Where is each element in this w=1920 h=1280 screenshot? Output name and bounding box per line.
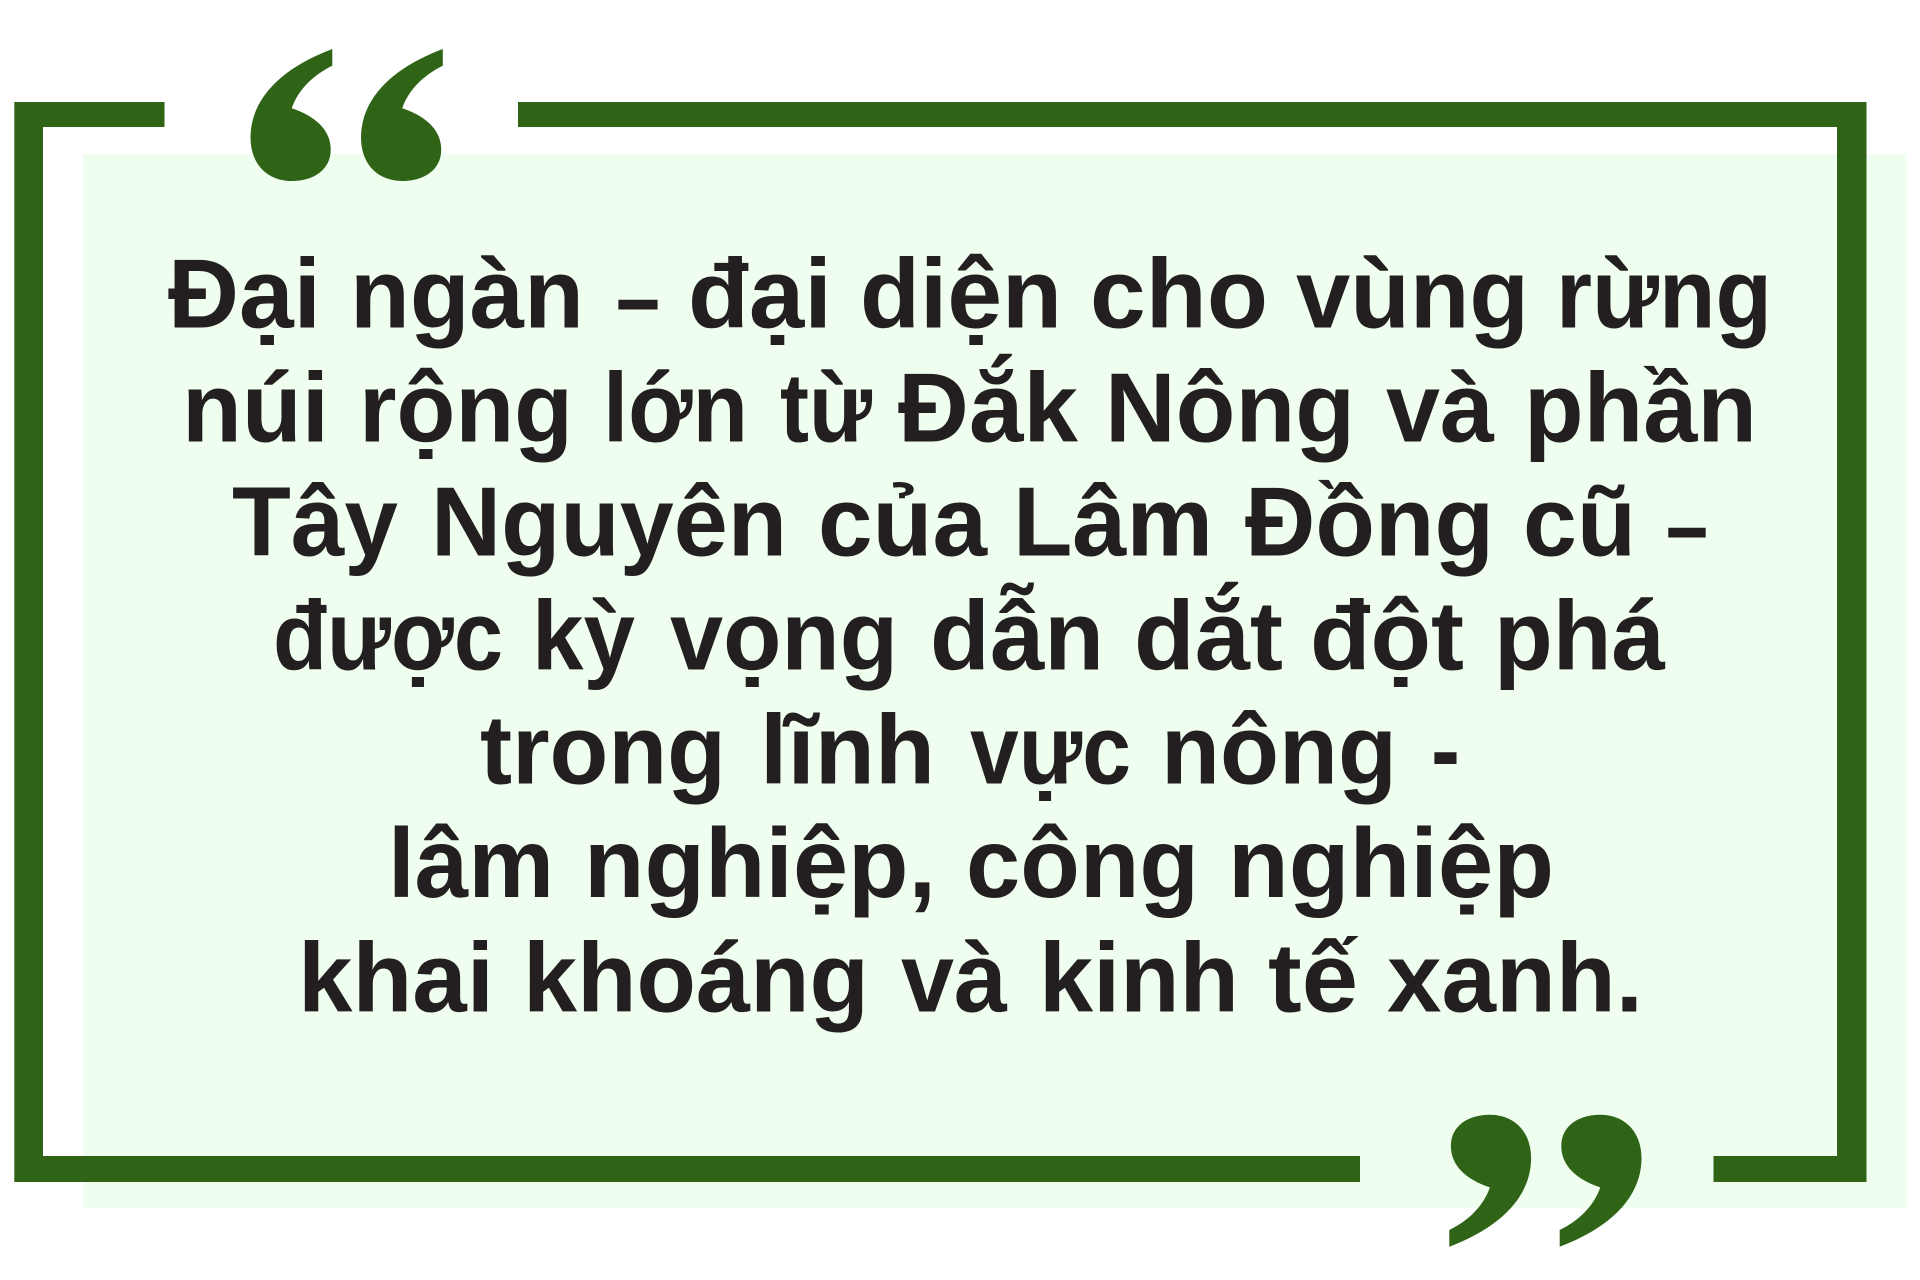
quote text: – bbox=[1666, 470, 1708, 580]
quote text: kỳ bbox=[532, 580, 635, 690]
quote text: phá bbox=[1494, 580, 1665, 690]
quote text: rộng bbox=[359, 352, 573, 462]
quote text: tế bbox=[1268, 922, 1359, 1032]
quote text: và bbox=[1386, 352, 1494, 462]
quote text: trong bbox=[480, 694, 726, 804]
quote text: Tây bbox=[232, 466, 398, 576]
quote text: kinh bbox=[1039, 922, 1239, 1032]
quote text: đại bbox=[688, 238, 832, 348]
quote text: xanh. bbox=[1387, 922, 1643, 1032]
quote text: và bbox=[901, 922, 1007, 1032]
quote text: lĩnh bbox=[760, 694, 935, 804]
quote text: khai bbox=[298, 922, 494, 1032]
panel background bbox=[83, 154, 1906, 1208]
quote text: ngàn bbox=[350, 238, 584, 348]
quote text: diện bbox=[860, 238, 1062, 348]
quote text: khoáng bbox=[523, 922, 869, 1032]
quote text: nghiệp, bbox=[584, 808, 936, 918]
quote text: của bbox=[818, 466, 988, 576]
quote text: núi bbox=[182, 352, 329, 462]
quote text: phần bbox=[1524, 352, 1757, 462]
quote text: Lâm bbox=[1013, 466, 1213, 576]
quote text: cho bbox=[1090, 238, 1268, 348]
quote text: công bbox=[966, 808, 1199, 918]
quote text: rừng bbox=[1556, 238, 1772, 348]
quote text: nghiệp bbox=[1228, 808, 1554, 918]
quote text: lâm bbox=[388, 808, 554, 918]
quote text: lớn bbox=[603, 352, 748, 462]
quote text: vực bbox=[970, 694, 1131, 804]
quote text: dắt bbox=[1134, 580, 1283, 690]
quote text: vọng bbox=[670, 580, 898, 690]
icon: opening quotation mark bbox=[250, 49, 443, 181]
quote text: từ bbox=[780, 352, 872, 462]
quote text: đột bbox=[1310, 580, 1464, 690]
quote text: vùng bbox=[1296, 238, 1529, 348]
quote text: dẫn bbox=[930, 580, 1104, 690]
quote text: nông bbox=[1161, 694, 1397, 804]
quote text: Đắk bbox=[898, 352, 1078, 462]
quote text: Nguyên bbox=[431, 466, 787, 576]
quote text: – bbox=[616, 242, 660, 352]
quote text bbox=[168, 238, 1772, 1032]
quote text: được bbox=[273, 580, 503, 690]
quote text: Nông bbox=[1105, 352, 1355, 462]
quote text: Đại bbox=[168, 238, 321, 348]
quote text: cũ bbox=[1523, 466, 1636, 576]
quote text: Đồng bbox=[1245, 466, 1494, 576]
icon: closing quotation mark bbox=[1449, 1115, 1642, 1247]
quote text: - bbox=[1431, 694, 1460, 804]
